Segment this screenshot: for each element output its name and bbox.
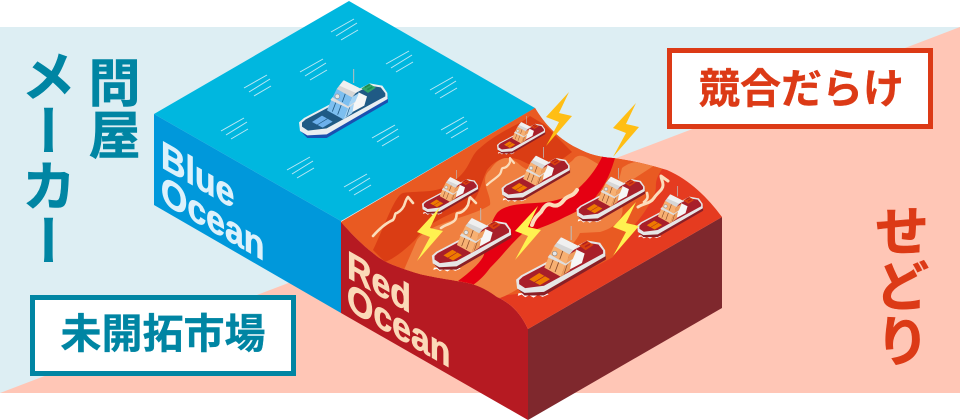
- ship 7: [637, 186, 703, 239]
- ship 5: [516, 226, 606, 298]
- ship 3: [422, 170, 478, 215]
- blue ocean ship: [299, 69, 388, 140]
- bolt: amber right: [613, 103, 639, 157]
- heading: メーカー: メーカー: [13, 48, 75, 268]
- water ripples: [221, 19, 468, 195]
- bolt: yellow left: [417, 207, 443, 261]
- label: Blue Ocean: Ocean: [161, 168, 264, 270]
- ship 4: [432, 208, 511, 271]
- blue block top surface: [154, 1, 535, 221]
- label box: 競合だらけ: 競合だらけ: [699, 66, 904, 112]
- heading: せどり: せどり: [866, 203, 928, 368]
- ship 6: [576, 168, 645, 223]
- red ocean block: [330, 92, 730, 420]
- bolt: yellow right: [613, 202, 639, 256]
- blue block front face: [154, 114, 341, 313]
- ship 2: [501, 147, 570, 202]
- label: Red Ocean: Red: [347, 243, 411, 323]
- red block right side face: [528, 217, 722, 420]
- label box: 競合だらけ: [667, 48, 933, 129]
- red ocean ships: [422, 116, 703, 298]
- label: Red Ocean: Ocean: [347, 275, 450, 377]
- red block front face: [341, 222, 528, 420]
- bolt: yellow centre: [515, 206, 541, 260]
- cream wave cracks: [373, 158, 668, 236]
- bolt: amber left: [546, 92, 572, 146]
- blue ocean block: [154, 1, 535, 313]
- ship 1: [497, 116, 545, 155]
- red block wavy top surface: [341, 108, 722, 329]
- label box: 未開拓市場: [30, 295, 296, 376]
- label box: 未開拓市場: 未開拓市場: [60, 311, 266, 357]
- heading: 問屋: 問屋: [80, 56, 138, 160]
- label: Blue Ocean: Blue: [161, 133, 234, 218]
